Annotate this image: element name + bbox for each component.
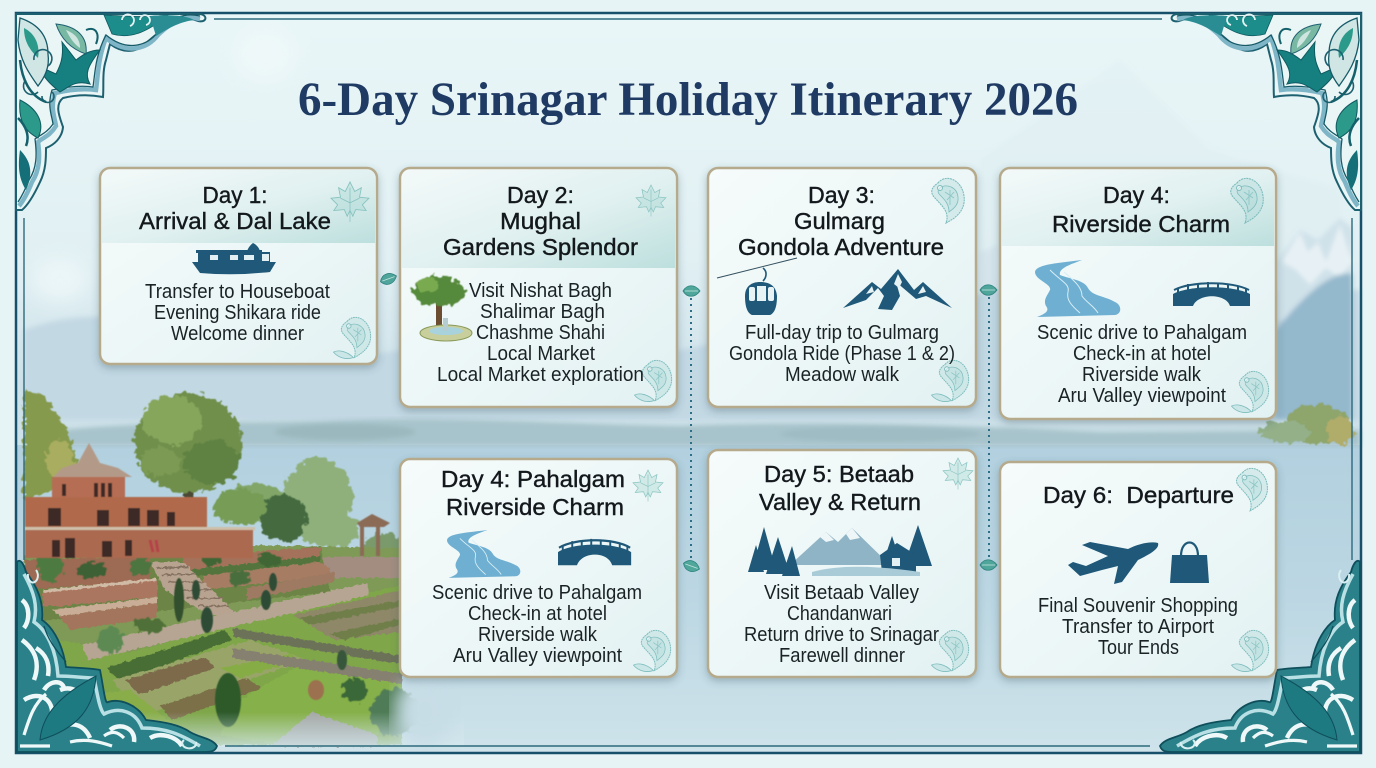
- activities: Return drive to Srinagar: [744, 624, 939, 646]
- panel: day 3: [708, 168, 976, 407]
- activities: [437, 280, 644, 386]
- watermark paisley: top: [932, 178, 964, 223]
- activities: [729, 322, 955, 386]
- activities: Shalimar Bagh: [480, 301, 605, 323]
- activities: Riverside walk: [1082, 364, 1202, 386]
- activities: Welcome dinner: [171, 323, 304, 345]
- heading: Valley & Return: [759, 489, 921, 515]
- activities: Riverside walk: [478, 624, 598, 646]
- watermark paisley: [634, 360, 672, 402]
- watermark paisley: top: [1237, 468, 1267, 511]
- corner ornament: top left: [16, 14, 205, 210]
- icon: tree and fountain: [412, 276, 472, 341]
- heading: Day 5: Betaab: [764, 461, 914, 487]
- icon: bridge: [1173, 282, 1250, 306]
- activities: Local Market: [487, 343, 595, 365]
- activities: Chashme Shahi: [476, 322, 605, 344]
- activities: Farewell dinner: [779, 645, 905, 667]
- icon: bridge: [558, 539, 631, 565]
- panel: day 1: [100, 168, 377, 364]
- heading: Arrival & Dal Lake: [139, 208, 331, 234]
- panel: day 6: [1000, 462, 1276, 677]
- activities: Check-in at hotel: [1073, 343, 1211, 365]
- activities: [432, 582, 642, 667]
- activities: Visit Nishat Bagh: [469, 280, 612, 302]
- activities: [744, 582, 939, 667]
- activities: Gondola Ride (Phase 1 & 2): [729, 343, 955, 365]
- watermark paisley: bottom: [1232, 371, 1269, 413]
- watermark paisley: [932, 630, 969, 672]
- activities: Evening Shikara ride: [154, 302, 321, 324]
- heading: [1052, 182, 1230, 237]
- watermark leaf: [636, 185, 666, 216]
- icon: forest, mountains and cabin: [748, 525, 932, 576]
- activities: Transfer to Airport: [1062, 616, 1214, 638]
- icon: mountains: [843, 269, 952, 310]
- icon: river: [447, 530, 520, 578]
- icon: airplane: [1068, 542, 1158, 584]
- icon: gondola: [717, 258, 797, 315]
- activities: Transfer to Houseboat: [145, 281, 330, 303]
- activities: Visit Betaab Valley: [764, 582, 919, 604]
- heading: Day 1:: [202, 182, 268, 208]
- activities: Scenic drive to Pahalgam: [432, 582, 642, 604]
- watermark leaf: [331, 182, 369, 222]
- corner ornament: top right: [1172, 14, 1361, 210]
- watermark paisley: [334, 317, 371, 359]
- corner ornament: bottom left: [17, 561, 217, 752]
- heading: [443, 182, 638, 260]
- activities: Local Market exploration: [437, 364, 644, 386]
- scene: Mughal garden photo: [20, 388, 414, 748]
- watermark paisley: [634, 630, 671, 672]
- heading: Day 6: Departure: [1043, 482, 1234, 508]
- heading: Day 4:: [1103, 182, 1170, 208]
- panel: day 4 riverside charm: [1000, 168, 1276, 419]
- heading: Gulmarg: [794, 208, 885, 234]
- heading: [441, 466, 625, 520]
- panel: day 5: [708, 450, 976, 677]
- watermark paisley: bottom: [932, 360, 969, 402]
- icon: houseboat: [192, 243, 276, 274]
- activities: [1037, 322, 1247, 407]
- corner ornament: bottom right: [1160, 561, 1360, 752]
- title: 6-Day Srinagar Holiday Itinerary 2026: [298, 73, 1078, 126]
- connector: dotted line from day 2 to day 4 Pahalgam: [682, 286, 701, 574]
- icon: shopping bag: [1170, 542, 1209, 583]
- heading: Day 2:: [507, 182, 574, 208]
- heading: [738, 182, 944, 260]
- panel: day 4 Pahalgam: [400, 459, 677, 677]
- activities: [1038, 595, 1238, 659]
- watermark paisley: bottom: [1232, 630, 1269, 672]
- activities: Aru Valley viewpoint: [1058, 385, 1226, 407]
- heading: Mughal: [500, 208, 581, 234]
- watermark paisley: top: [1231, 178, 1263, 223]
- heading: Riverside Charm: [1052, 211, 1230, 237]
- activities: [145, 281, 330, 345]
- heading: Gondola Adventure: [738, 234, 944, 260]
- activities: Meadow walk: [785, 364, 900, 386]
- heading: Gardens Splendor: [443, 234, 638, 260]
- activities: Final Souvenir Shopping: [1038, 595, 1238, 617]
- activities: Aru Valley viewpoint: [453, 645, 622, 667]
- watermark leaf: [633, 470, 663, 502]
- heading: Day 4: Pahalgam: [441, 466, 625, 492]
- panel: day 2: [400, 168, 677, 407]
- connector: dotted line from day 3 to day 6: [980, 285, 997, 570]
- activities: Chandanwari: [787, 603, 892, 625]
- activities: Full-day trip to Gulmarg: [745, 322, 939, 344]
- heading: [759, 461, 921, 515]
- watermark leaf: [943, 458, 973, 490]
- icon: river: [1035, 260, 1120, 317]
- activities: Scenic drive to Pahalgam: [1037, 322, 1247, 344]
- activities: Tour Ends: [1098, 637, 1179, 659]
- activities: Check-in at hotel: [468, 603, 607, 625]
- heading: Day 3:: [808, 182, 875, 208]
- heading: Riverside Charm: [446, 494, 624, 520]
- connector: leaf between day 1 and day 2: [379, 271, 398, 287]
- heading: [139, 182, 331, 234]
